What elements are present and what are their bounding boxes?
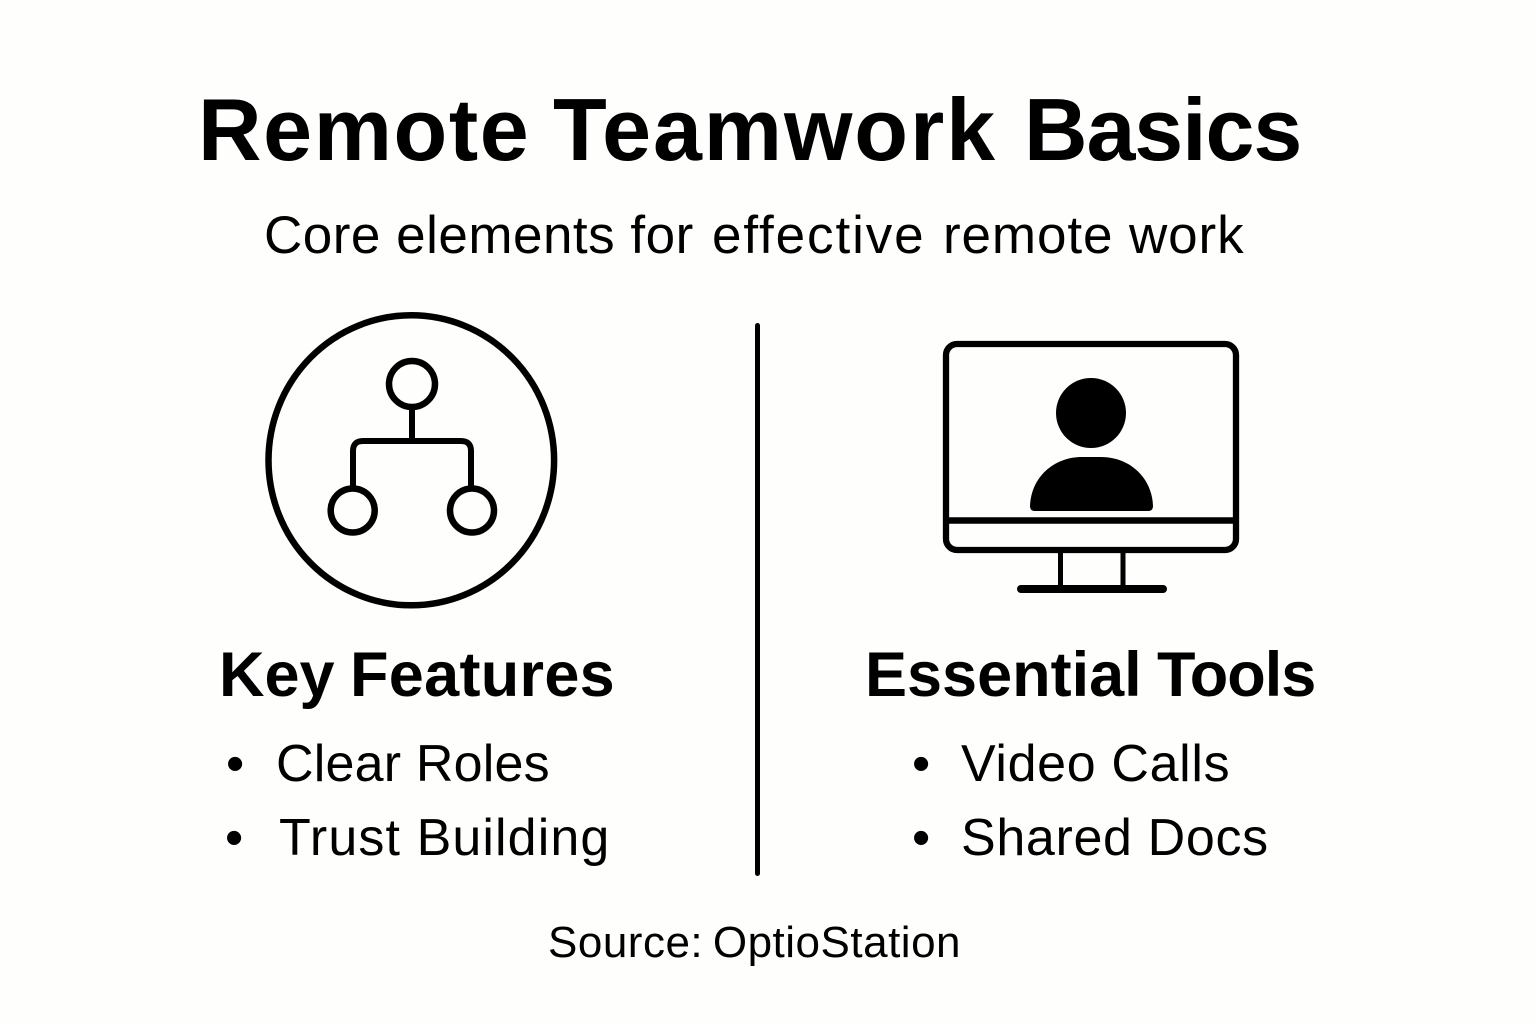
title [198,80,1301,179]
title: Basics [1024,80,1301,179]
subtitle: Core elements for [264,206,694,265]
list: Essential Tools: • [912,809,930,867]
heading: Key Features: Key [219,640,335,710]
subtitle: effective [712,206,926,265]
title: Remote [198,80,530,179]
list: Key Features: • [226,735,244,793]
list: Key Features: Trust Building [279,809,610,867]
subtitle [264,206,1244,265]
list: Essential Tools: Shared Docs [961,809,1269,867]
list: Key Features: • [225,809,243,867]
heading: Essential Tools: Essential [865,640,1142,710]
list: Key Features [225,735,610,867]
list: Essential Tools: • [912,735,930,793]
list: Key Features: Clear Roles [276,735,550,793]
heading: Key Features [219,640,615,710]
source: Source: OptioStation [548,918,961,967]
heading: Essential Tools: Tools [1157,640,1315,710]
icon: video call monitor [942,340,1240,593]
list: Essential Tools: Video Calls [961,735,1230,793]
list: Essential Tools [912,735,1269,867]
subtitle: remote work [943,206,1244,265]
divider [755,323,760,876]
title: Teamwork [553,80,997,179]
heading: Essential Tools [865,640,1315,710]
icon: hierarchy network in circle [265,312,558,608]
heading: Key Features: Features [350,640,615,710]
